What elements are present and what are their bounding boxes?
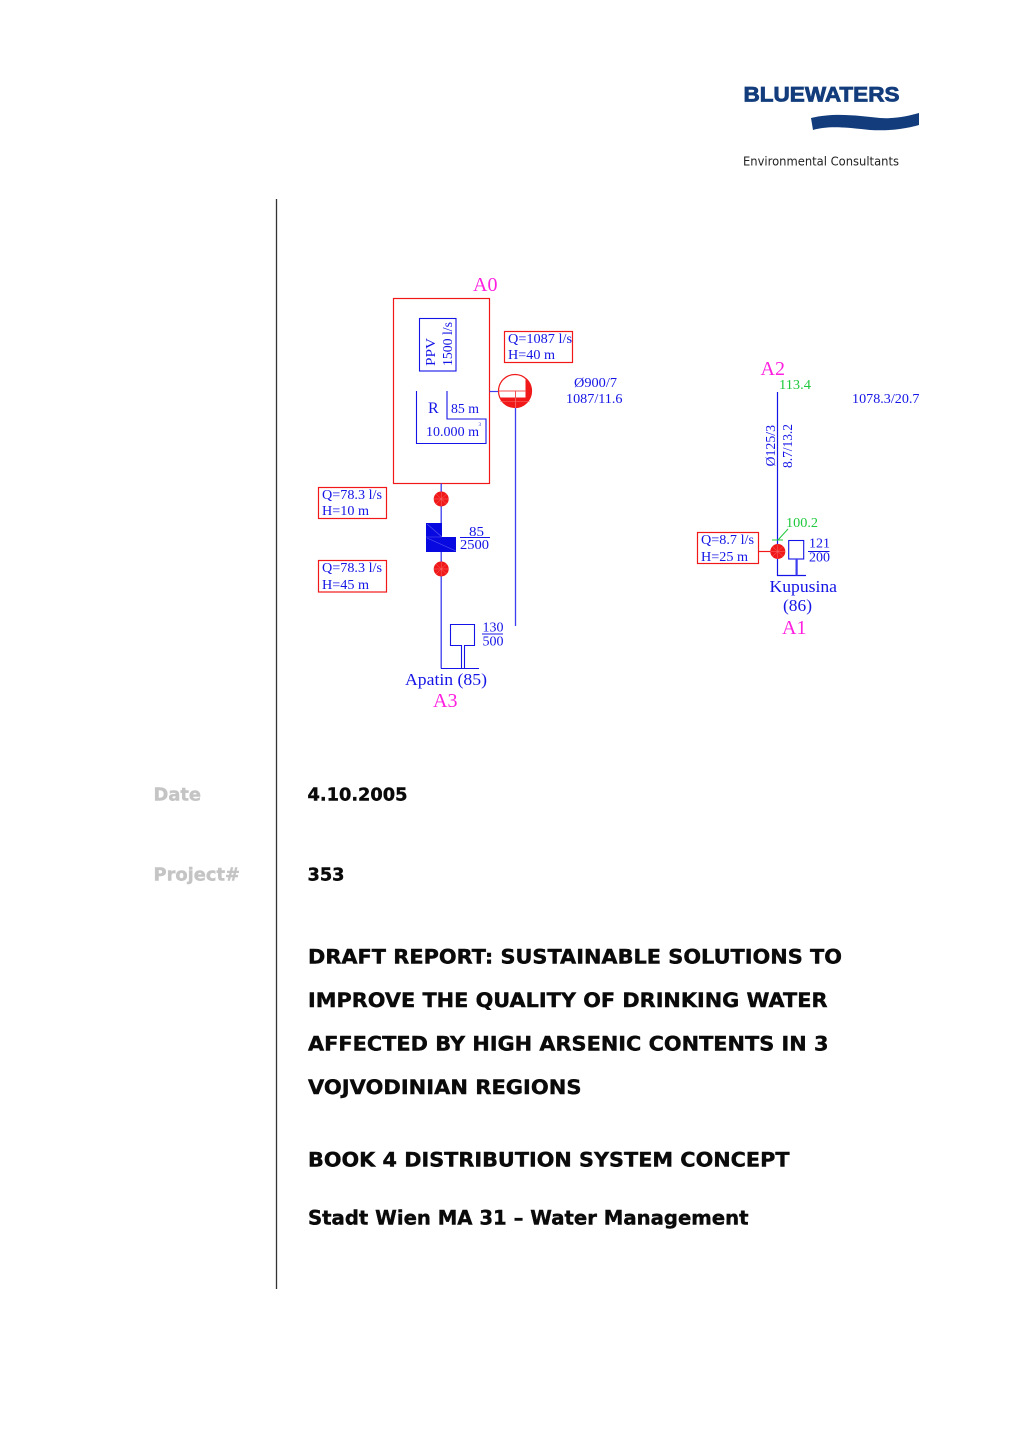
callout: Q=8.7: H=25 m	[701, 550, 748, 565]
pipe label: O900/7	[566, 376, 622, 407]
label: A3: A3	[433, 690, 457, 712]
callout: Q=78.3 H=45	[318, 560, 386, 593]
pipe label: O900/7: 1087/11.6	[566, 392, 622, 407]
PPV box	[420, 318, 456, 371]
water tower Apatin: 500	[482, 634, 504, 650]
fraction 85/2500	[460, 525, 490, 553]
elevation 100.2: 100.2	[786, 516, 818, 531]
callout: Q=78.3 H=10	[318, 488, 386, 519]
report title: VOJVODINIAN REGIONS	[308, 1076, 582, 1099]
book subtitle: BOOK 4 DISTRIBUTION SYSTEM CONCEPT	[308, 1149, 790, 1172]
pipe rotated labels: 8.7/13.2	[781, 424, 796, 468]
pump dot 1	[434, 492, 449, 506]
vertical divider	[276, 199, 278, 1289]
pipe rotated labels	[764, 424, 796, 468]
pump station symbol	[490, 374, 532, 408]
pump dot 2	[434, 562, 449, 576]
callout: Q=1087	[504, 332, 572, 363]
label: A0: A0	[473, 274, 497, 296]
date value: 4.10.2005	[308, 786, 408, 806]
logo: Bluewaters: BLUEWATERS	[744, 82, 900, 106]
pipe Kupusina	[778, 392, 806, 576]
logo: Bluewaters	[743, 82, 919, 168]
report title: DRAFT REPORT: SUSTAINABLE SOLUTIONS TO	[308, 946, 842, 969]
label: Kupusina: (86)	[783, 596, 812, 615]
pipe to Apatin	[440, 484, 442, 668]
label: Kupusina: Kupusina	[770, 577, 837, 596]
pipe rotated labels: Ø125/3	[764, 425, 779, 466]
reservoir R	[416, 391, 486, 444]
fraction 85/2500: 85	[469, 525, 484, 540]
callout: Q=78.3 H=10: Q=78.3 l/s	[322, 488, 382, 503]
water tower Kupusina	[789, 536, 830, 576]
client: Stadt Wien MA 31 – Water Management	[308, 1207, 748, 1230]
water tower Apatin: 130	[482, 620, 504, 636]
report title: IMPROVE THE QUALITY OF DRINKING WATER	[308, 989, 828, 1012]
callout: Q=1087: Q=1087 l/s	[508, 332, 572, 347]
callout: Q=78.3 H=45: H=45 m	[322, 578, 369, 593]
report title	[308, 946, 842, 1099]
label: A1: A1	[782, 617, 806, 639]
pipe label: O900/7: Ø900/7	[574, 376, 617, 391]
reservoir R: 85 m	[451, 402, 479, 417]
fraction 85/2500: 2500	[460, 538, 489, 553]
callout: Q=8.7: Q=8.7 l/s	[701, 533, 754, 548]
logo: Bluewaters: Environmental Consultants	[743, 154, 899, 168]
label: Date: Date	[154, 786, 201, 806]
PPV box: 1500 l/s	[441, 322, 456, 366]
elevation 113.4: 113.4	[779, 378, 811, 393]
transmission pipe	[514, 408, 516, 626]
reservoir zone box A0	[394, 298, 490, 484]
label: Kupusina	[770, 577, 837, 615]
reservoir R: 10.000 m	[426, 425, 479, 440]
reservoir R: 3	[478, 423, 482, 428]
PPV box: PPV	[424, 338, 439, 366]
label: Apatin: Apatin (85)	[405, 670, 487, 689]
reservoir R: R	[428, 400, 439, 417]
label: A2: A2	[760, 358, 785, 380]
diagram: A0 Apatin system	[318, 274, 572, 712]
label: Project: Project#	[154, 866, 240, 886]
callout: Q=1087: H=40 m	[508, 348, 555, 363]
water tower Kupusina: 121	[809, 536, 830, 552]
callout: Q=78.3 H=10: H=10 m	[322, 504, 369, 519]
pipe label: 1078.3/20.7: 1078.3/20.7	[852, 392, 920, 407]
pump dot	[770, 544, 785, 559]
elevation 100.2	[772, 516, 818, 540]
callout: Q=8.7	[698, 532, 771, 565]
water tower Apatin	[441, 620, 504, 668]
callout: Q=78.3 H=45: Q=78.3 l/s	[322, 561, 382, 576]
treatment block	[426, 523, 456, 552]
project number: 353	[308, 866, 344, 886]
diagram: Kupusina system	[698, 358, 837, 639]
report title: AFFECTED BY HIGH ARSENIC CONTENTS IN 3	[308, 1033, 828, 1056]
water tower Kupusina: 200	[809, 550, 830, 566]
